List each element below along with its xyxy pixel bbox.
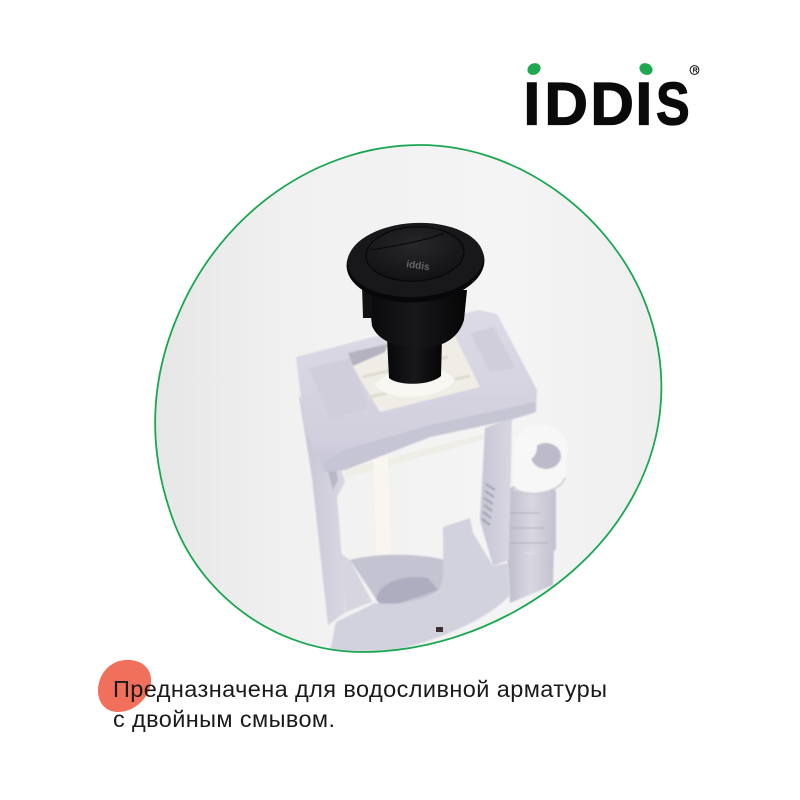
- registered mark: [690, 66, 699, 75]
- product photo in green outlined blob: [150, 140, 670, 660]
- overflow tube assembly: [507, 442, 566, 604]
- logo wordmark: IDDI: [524, 70, 652, 138]
- white rod: [374, 459, 388, 470]
- left leg of frame: [299, 395, 346, 625]
- grey top plate: [296, 310, 537, 472]
- registered mark: R: [693, 68, 698, 75]
- small square mark: [436, 627, 443, 632]
- coral accent blob: [98, 660, 151, 712]
- button body: [362, 290, 467, 348]
- logo green dot left: [525, 61, 543, 77]
- caption line 1: Предназначена для водосливной арматуры: [113, 676, 607, 702]
- caption text: [113, 676, 607, 732]
- green outline: [155, 145, 661, 652]
- photo background: [150, 140, 670, 660]
- black flush button: [345, 219, 486, 384]
- opening with white insert: [348, 336, 480, 412]
- logo wordmark: S: [656, 70, 690, 137]
- button cap: [346, 248, 484, 302]
- logo green dot right: [637, 61, 655, 77]
- caption line 2: с двойным смывом.: [113, 706, 335, 732]
- button stem: [387, 338, 442, 384]
- white band under plate: [345, 432, 490, 478]
- button logo: iddis: [406, 259, 431, 273]
- logo: IDDIS: [524, 61, 699, 137]
- right leg of frame: [480, 418, 512, 566]
- lower housing: [330, 518, 510, 652]
